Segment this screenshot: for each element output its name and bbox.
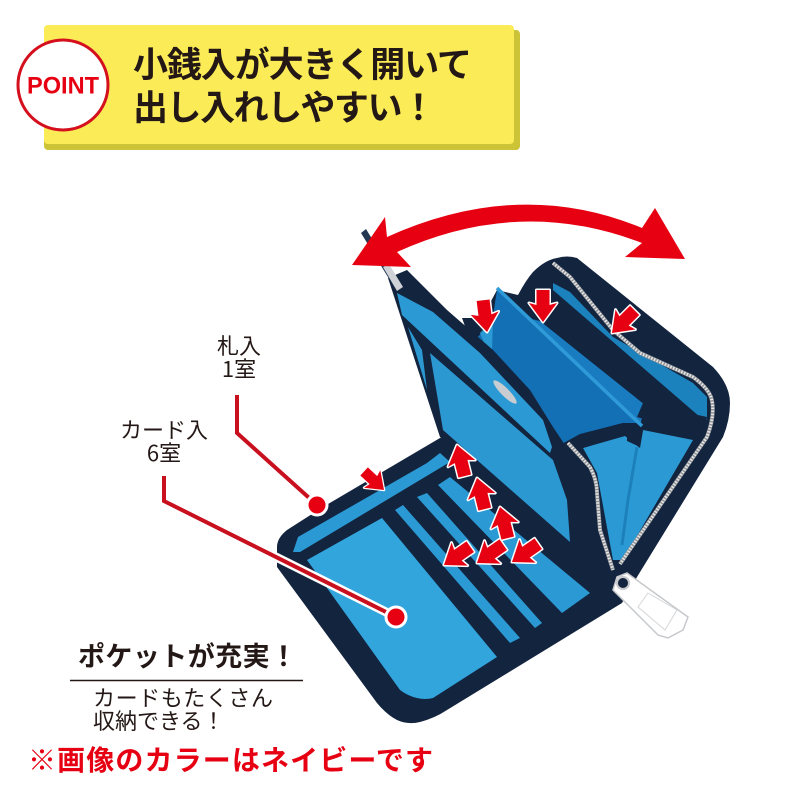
flap body [388, 270, 612, 600]
label: bill pocket [217, 329, 261, 384]
strap right [637, 403, 707, 437]
pocket description: 収納できる！ [93, 704, 225, 736]
divider edge [497, 288, 642, 426]
front divider panel [470, 290, 640, 445]
label: card pockets: 6室 [147, 436, 181, 468]
upper flap [361, 229, 612, 600]
upper back lining [553, 283, 707, 420]
pocket description: カードもたくさん [93, 681, 273, 713]
left zipper [568, 443, 613, 570]
navy binding [277, 438, 622, 723]
pocket tab [627, 425, 643, 447]
zipper clip [613, 573, 688, 638]
double-headed arc arrow [352, 205, 685, 267]
pocket crease [622, 447, 637, 545]
label: card pockets [120, 413, 208, 468]
flap top tab [361, 229, 400, 287]
leader line: card pockets [164, 476, 406, 627]
side sliver [408, 327, 427, 390]
light lining corner [480, 320, 493, 350]
colour note: ※画像のカラーはネイビーです [28, 739, 433, 779]
right zipper [553, 263, 713, 564]
front pocket lining [583, 430, 693, 560]
card slot stripe 1 [395, 505, 520, 643]
bill pocket [430, 353, 570, 542]
strap left [578, 423, 625, 448]
wallet photo [277, 229, 730, 723]
pocket heading: ポケットが充実！ [78, 635, 297, 674]
rear divider panel [527, 318, 645, 426]
headline: 小銭入が大きく開いて [133, 37, 472, 88]
lower card flap [277, 438, 622, 723]
label: bill pocket: 札入 [217, 329, 261, 361]
card slot stripe 2 [417, 493, 542, 628]
POINT badge: POINT [27, 72, 99, 100]
headline: 出し入れしやすい！ [133, 80, 436, 131]
leader line: bill pocket [237, 395, 327, 515]
label: card pockets: カード入 [120, 413, 208, 445]
opening arrows [356, 290, 645, 576]
top blue strip [397, 293, 552, 453]
divider line [70, 680, 303, 682]
right compartment [462, 256, 730, 603]
POINT badge [18, 40, 108, 130]
card slot stripe 3 [438, 477, 590, 613]
snap button [491, 378, 519, 406]
top blue strip [293, 453, 450, 552]
headline [133, 37, 472, 131]
large blue card panel [307, 518, 497, 699]
label: bill pocket: 1室 [222, 352, 256, 384]
pocket description [93, 681, 273, 736]
flap metal ring [383, 264, 403, 291]
header banner [18, 25, 520, 150]
